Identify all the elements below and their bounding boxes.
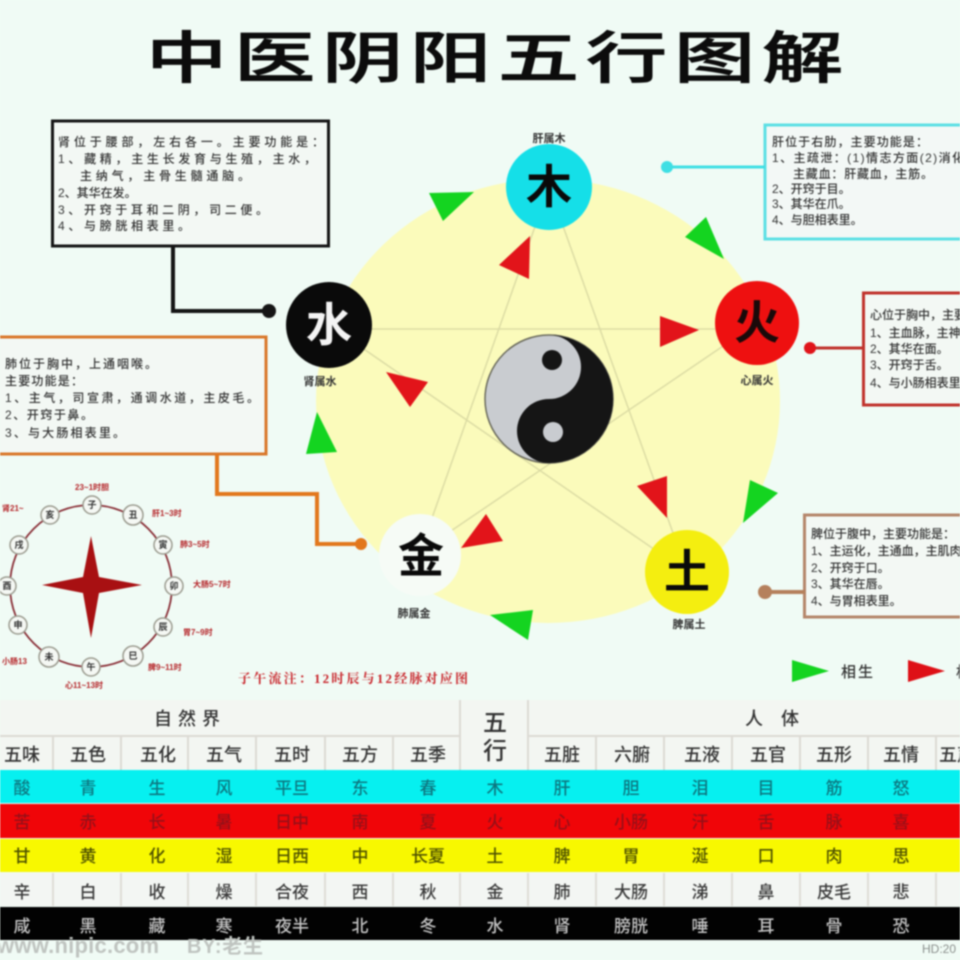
panel: lung: 3、与大肠相表里。	[5, 425, 125, 440]
panel: liver: 肝位于右肋，主要功能是：	[772, 134, 928, 149]
panel: liver: 主藏血：肝藏血，主筋。	[793, 166, 933, 181]
row: earth: 甘	[14, 847, 30, 866]
row: wood: 目	[758, 779, 774, 798]
table header	[0, 700, 960, 770]
row: water: 肾	[554, 917, 570, 936]
panel: spleen	[804, 515, 960, 617]
row: metal: 悲	[892, 883, 910, 902]
table header: 自然界	[154, 708, 226, 729]
panel: liver	[765, 125, 960, 239]
panel: spleen: 脾位于腹中，主要功能是：	[811, 526, 955, 541]
row: metal: 金	[486, 882, 504, 902]
row: fire: 舌	[758, 813, 774, 832]
chart: twelve-hour meridian clock: 辰	[158, 622, 168, 632]
row: earth: 黄	[80, 847, 96, 866]
yin-yang symbol	[485, 335, 613, 463]
row: fire: 日中	[275, 813, 309, 832]
chart: twelve-hour meridian clock: 戌	[14, 539, 24, 550]
row: earth	[0, 839, 960, 872]
table header: 五形	[816, 745, 852, 765]
chart: twelve-hour meridian clock: 肝1~3时	[152, 508, 182, 518]
chart: twelve-hour meridian clock: 子	[87, 499, 97, 510]
row: wood: 平旦	[275, 779, 309, 798]
row: metal: 秋	[420, 883, 436, 902]
title: 中医阴阳五行图解	[146, 27, 850, 90]
element: metal: 肺属金	[398, 606, 430, 620]
panel: heart: 2、其华在面。	[870, 341, 949, 356]
panel: kidney: 1、藏精，主生长发育与生殖，主水，	[58, 151, 316, 166]
chart: twelve-hour meridian clock: 肺3~5时	[180, 539, 210, 549]
panel: liver: 4、与胆相表里。	[772, 212, 863, 227]
row: water	[0, 907, 960, 940]
panel: spleen: 3、其华在唇。	[811, 576, 890, 591]
legend	[792, 660, 960, 682]
row: water: 黑	[80, 917, 96, 936]
chart: twelve-hour meridian clock: 心11~13时	[65, 680, 103, 690]
chart: twelve-hour meridian clock: 午	[86, 661, 96, 672]
table header: 行	[483, 738, 507, 765]
row: wood: 生	[148, 779, 166, 798]
panel: lung	[0, 337, 266, 454]
legend: 相生	[841, 664, 875, 681]
yellow circle background	[316, 179, 780, 623]
row: water: 膀胱	[614, 917, 648, 936]
element: fire: 心属火	[740, 374, 774, 387]
row: water: 咸	[14, 917, 30, 936]
row: earth: 涎	[692, 847, 708, 866]
panel: heart	[864, 293, 960, 405]
table header: 五官	[750, 745, 786, 765]
element: earth: 脾属土	[672, 617, 706, 631]
row: earth: 化	[148, 847, 166, 866]
chart: twelve-hour meridian clock: 巳	[128, 651, 138, 661]
row: metal: 西	[352, 883, 368, 902]
element: water: 水	[306, 299, 352, 351]
watermark: BY:老生	[187, 935, 263, 958]
row: earth: 日西	[275, 847, 309, 866]
panel: spleen: 2、开窍于口。	[811, 560, 890, 575]
chart: twelve-hour meridian clock: 大肠5~7时	[193, 579, 231, 589]
row: earth: 长夏	[411, 847, 445, 866]
row: metal: 大肠	[614, 883, 648, 902]
table header: 五	[483, 710, 507, 737]
row: fire: 脉	[826, 813, 842, 832]
row: fire: 长	[148, 813, 166, 832]
panel: kidney: 3、开窍于耳和二阴，司二便。	[58, 202, 268, 217]
element: earth: 土	[664, 546, 710, 598]
row: wood: 青	[80, 779, 96, 798]
connector: spleen to earth	[758, 585, 805, 599]
row: metal: 合夜	[275, 883, 309, 902]
row: earth: 中	[352, 847, 368, 866]
row: fire	[0, 804, 960, 838]
row: metal: 辛	[14, 883, 30, 902]
element: earth	[645, 530, 729, 631]
panel: heart: 3、开窍于舌。	[870, 357, 949, 372]
clock caption: 子午流注：12时辰与12经脉对应图	[238, 671, 468, 686]
row: wood: 风	[216, 779, 232, 798]
row: metal: 燥	[216, 883, 232, 902]
table header: 五味	[4, 745, 40, 765]
table header: 五情	[883, 745, 919, 765]
connector: heart to fire	[804, 342, 864, 354]
table header: 五时	[274, 745, 310, 765]
table header: 六腑	[614, 745, 650, 765]
row: wood: 泪	[692, 779, 708, 798]
chart: twelve-hour meridian clock: 23~1时胆	[75, 482, 109, 492]
connector: lung to metal	[217, 454, 367, 550]
chart: twelve-hour meridian clock: 酉	[2, 581, 12, 591]
row: fire: 夏	[420, 813, 436, 832]
panel: lung: 1、主气，司宣肃，通调水道，主皮毛。	[5, 390, 259, 405]
table header: 人 体	[745, 709, 799, 729]
row: water: 骨	[826, 917, 842, 936]
image id: HD:20	[922, 942, 956, 956]
table header: 五脏	[544, 745, 580, 765]
table header: 五化	[140, 745, 176, 765]
panel: lung: 主要功能是：	[5, 373, 83, 388]
row: wood: 怒	[892, 779, 910, 798]
table header: 五季	[410, 745, 446, 765]
table: five elements correspondence	[0, 700, 960, 940]
table header: 五色	[70, 745, 106, 765]
connector: kidney to water	[173, 246, 276, 318]
panel: kidney: 肾位于腰部，左右各一。主要功能是：	[58, 134, 324, 149]
panel: spleen: 4、与胃相表里。	[811, 593, 902, 608]
row: fire: 暑	[216, 813, 232, 832]
chart: twelve-hour meridian clock	[0, 482, 231, 690]
chart: twelve-hour meridian clock: 申	[13, 619, 23, 630]
element: metal	[379, 514, 461, 620]
panel: lung: 肺位于胸中，上通咽喉。	[5, 356, 157, 371]
row: wood: 肝	[554, 779, 570, 798]
row: water: 唾	[692, 917, 708, 936]
chart: twelve-hour meridian clock: 未	[44, 651, 54, 662]
chart: twelve-hour meridian clock: 亥	[45, 509, 55, 520]
element: water	[286, 282, 372, 388]
chart: twelve-hour meridian clock: 卯	[169, 580, 179, 591]
table header: 五液	[684, 745, 720, 765]
row: fire: 喜	[892, 813, 910, 832]
chart: twelve-hour meridian clock: 丑	[128, 510, 138, 520]
row: fire: 汗	[692, 813, 708, 832]
row: metal: 收	[148, 883, 166, 902]
red restraining arrows	[386, 236, 699, 548]
five-element pentagram lines	[329, 187, 757, 572]
row: water: 北	[352, 917, 368, 936]
chart: twelve-hour meridian clock: 寅	[158, 539, 168, 550]
row: wood: 木	[486, 779, 504, 798]
row: earth: 胃	[622, 847, 640, 866]
panel: liver: 3、其华在爪。	[772, 196, 851, 211]
panel: liver: 1、主疏泄：(1)情志方面(2)消化	[772, 150, 960, 165]
panel: kidney: 主纳气，主骨生髓通脑。	[80, 168, 250, 183]
element: fire	[715, 281, 799, 387]
row: fire: 火	[486, 813, 504, 832]
row: fire: 苦	[14, 813, 30, 832]
row: earth: 口	[758, 847, 774, 866]
row: metal: 肺	[554, 883, 570, 902]
row: water: 恐	[892, 917, 910, 936]
panel: kidney: 2、其华在发。	[58, 185, 137, 200]
row: metal	[0, 873, 960, 906]
chart: twelve-hour meridian clock: 脾9~11时	[148, 662, 182, 672]
row: water: 寒	[216, 917, 232, 936]
watermark: www.nipic.com	[0, 933, 159, 958]
row: earth: 肉	[826, 847, 842, 866]
row: wood: 东	[352, 779, 368, 798]
row: earth: 湿	[216, 847, 232, 866]
row: water: 藏	[148, 917, 166, 936]
row: metal: 鼻	[758, 882, 774, 902]
row: wood: 筋	[826, 779, 842, 798]
element: fire: 火	[734, 297, 780, 349]
icon: four-point star	[42, 536, 142, 638]
panel: lung: 2、开窍于鼻。	[5, 407, 93, 422]
row: fire: 南	[352, 813, 368, 832]
row: water: 耳	[758, 917, 774, 936]
element: wood: 肝属木	[532, 131, 566, 145]
row: earth: 思	[892, 847, 910, 866]
element: wood	[506, 131, 592, 230]
table header: 五方	[342, 745, 378, 765]
row: fire: 心	[554, 813, 570, 832]
element: water: 肾属水	[304, 374, 336, 388]
table header: 五气	[206, 745, 242, 765]
connector: liver to wood	[661, 161, 765, 173]
row: water: 冬	[420, 917, 436, 936]
row: wood: 春	[420, 779, 436, 798]
row: water: 水	[486, 917, 504, 936]
chart: twelve-hour meridian clock: 胃7~9时	[183, 627, 213, 637]
panel: kidney: 4、与膀胱相表里。	[58, 218, 190, 233]
element: wood: 木	[526, 161, 572, 213]
row: wood: 酸	[14, 779, 30, 798]
row: earth: 土	[486, 847, 504, 866]
row: earth: 脾	[554, 847, 570, 866]
element: metal: 金	[398, 530, 444, 582]
row: wood: 胆	[622, 779, 640, 798]
green generating arrows	[306, 192, 778, 640]
row: wood	[0, 770, 960, 803]
row: metal: 皮毛	[817, 883, 851, 902]
panel: kidney	[52, 121, 328, 246]
panel: liver: 2、开窍于目。	[772, 181, 851, 196]
row: metal: 白	[80, 883, 96, 902]
row: metal: 涕	[692, 883, 708, 902]
chart: twelve-hour meridian clock: 小肠13	[2, 656, 27, 666]
row: water: 夜半	[275, 917, 309, 936]
row: fire: 小肠	[614, 813, 648, 832]
chart: twelve-hour meridian clock: 肾21~	[2, 504, 24, 513]
row: fire: 赤	[80, 813, 96, 832]
watermark	[0, 933, 263, 958]
